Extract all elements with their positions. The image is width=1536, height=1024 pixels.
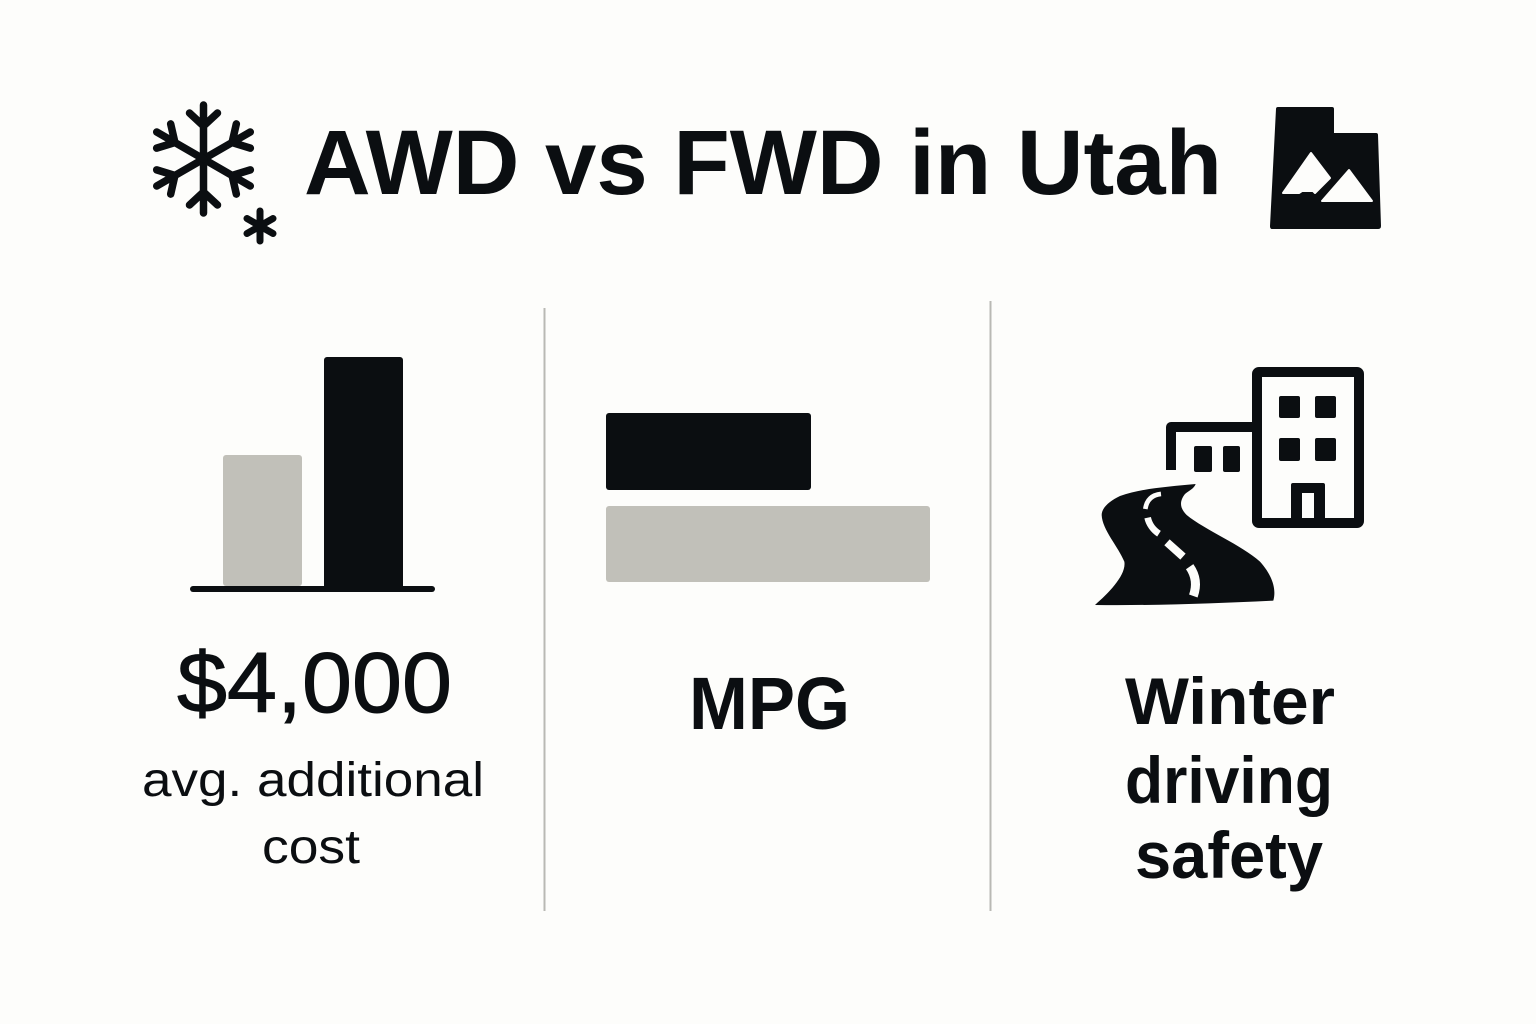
icon: tall building (1257, 372, 1359, 523)
panel: MPG (606, 413, 930, 745)
panel divider right (990, 301, 992, 911)
winter driving safety label: safety (1135, 818, 1323, 892)
icon: Utah state with mountains (1270, 107, 1381, 229)
cost caption: avg. additional (142, 754, 484, 807)
panel: cost (142, 357, 484, 874)
panel divider left (544, 308, 546, 911)
cost caption: cost (262, 821, 360, 874)
icon: buildings and road (1095, 372, 1359, 605)
icon: snowflake (150, 105, 273, 241)
icon: winding road (1095, 484, 1274, 605)
panel: winter driving safety (1095, 372, 1359, 892)
winter driving safety label: Winter (1125, 664, 1335, 738)
title: AWD vs FWD in Utah (304, 112, 1222, 214)
icon: low building (1171, 427, 1255, 472)
bar chart: cost comparison (190, 357, 435, 592)
bar chart: MPG comparison (606, 413, 930, 582)
MPG label: MPG (689, 662, 850, 745)
cost figure: $4,000 (177, 636, 452, 731)
winter driving safety label: driving (1125, 743, 1333, 817)
winter driving safety label (1125, 664, 1335, 892)
cost caption (142, 754, 484, 874)
